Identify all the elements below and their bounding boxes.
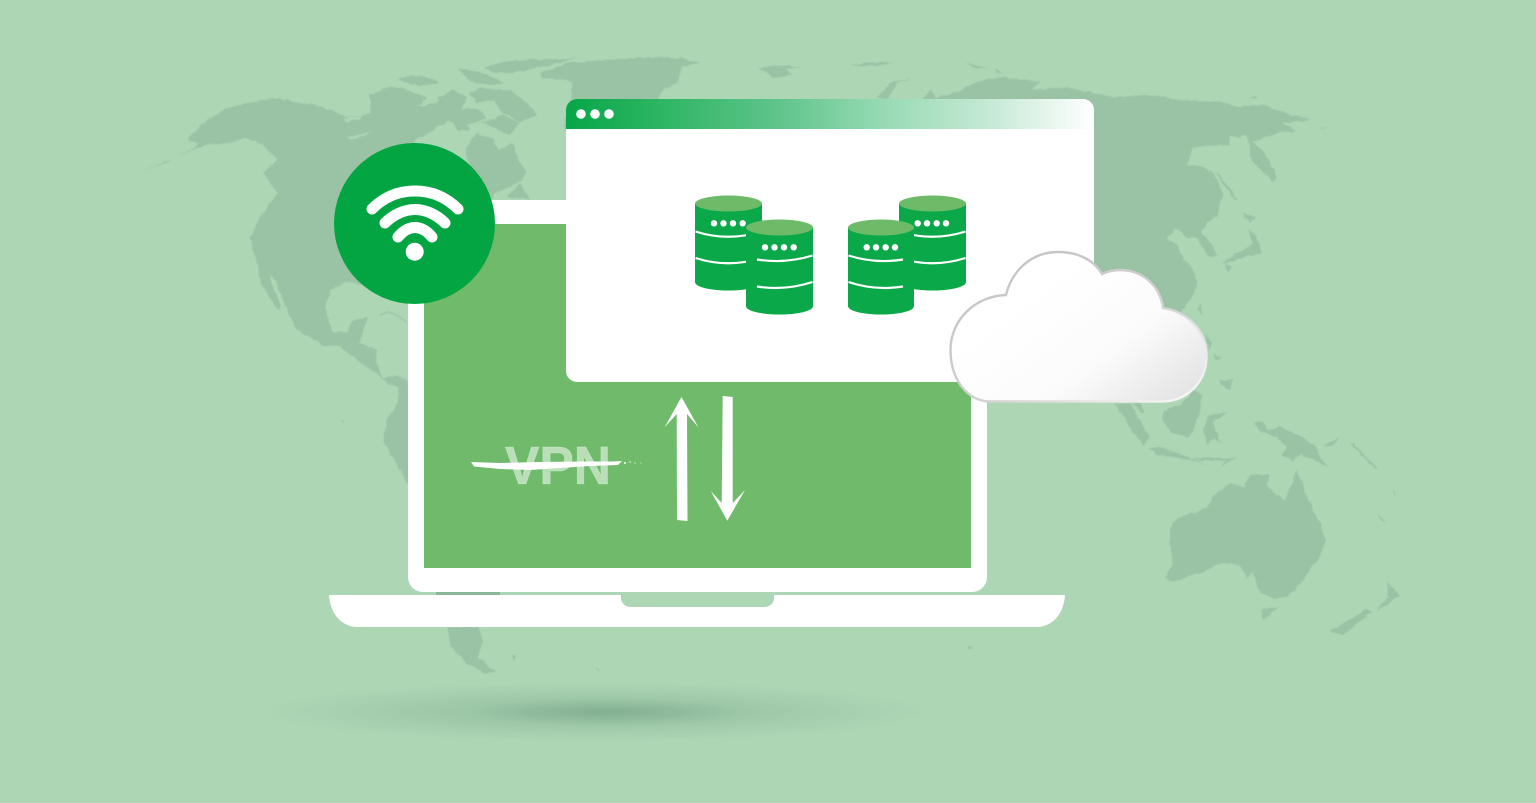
strike stroke: [471, 461, 642, 470]
Australia: [1165, 470, 1326, 598]
Greenland: [540, 57, 700, 132]
ground shadow: [260, 682, 930, 742]
world map silhouette: [135, 57, 1400, 674]
Japan, Sakhalin and nearby islands: [1198, 97, 1261, 390]
Arctic islands of Europe: [758, 62, 1005, 99]
arrow up: [664, 397, 698, 521]
Southeast Asia islands: [1115, 390, 1396, 522]
Arctic islands of Canada: [370, 58, 577, 135]
title bar: [566, 99, 1094, 129]
wifi icon: [372, 191, 458, 261]
Quebec and Atlantic Canada: [465, 133, 527, 200]
window body: [566, 99, 1094, 382]
VPN crossed out: [471, 436, 642, 496]
VPN label: VPN: [505, 436, 611, 496]
laptop: [329, 200, 1065, 627]
database C: [848, 220, 914, 314]
inland waters: [343, 115, 372, 140]
wifi badge: [334, 143, 495, 304]
database A: [695, 196, 762, 290]
Tasmania and New Zealand: [1262, 580, 1400, 635]
North and Central America with northern South America: [135, 98, 453, 483]
laptop notch: [621, 595, 774, 607]
database B: [746, 220, 813, 314]
badge circle: [334, 143, 495, 304]
arrow down: [711, 396, 745, 521]
database D: [899, 196, 966, 290]
sliver of South America between lid and base: [436, 592, 500, 596]
cloud: [950, 252, 1206, 402]
window control dots: [576, 109, 614, 119]
Russia and East Asia: [923, 77, 1312, 330]
laptop lid: [408, 200, 987, 592]
browser window: [566, 99, 1094, 382]
laptop screen: [424, 224, 971, 568]
small islets: [341, 127, 1326, 671]
laptop base: [329, 595, 1065, 627]
Patagonia: [447, 627, 497, 674]
